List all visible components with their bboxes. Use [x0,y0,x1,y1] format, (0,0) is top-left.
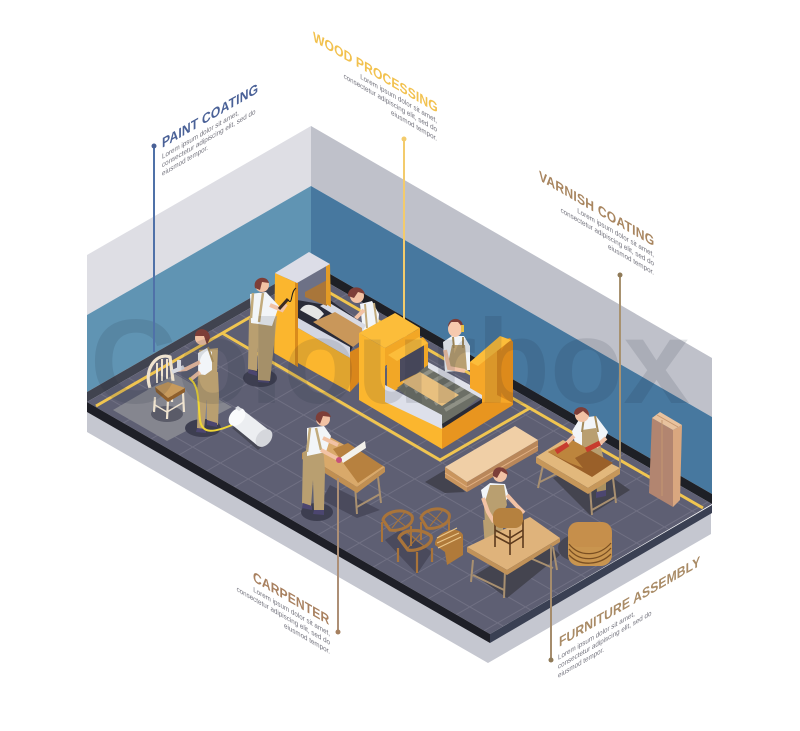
overalls [197,372,219,430]
machine 1 [274,252,366,392]
back panel [428,362,483,399]
callout: varnish coating [539,167,654,468]
gloves and arms [562,436,606,448]
arm [321,438,338,459]
legs [483,520,503,548]
base front [298,328,350,392]
text block: consectetur adipiscing elit, sed do [561,205,654,268]
shirt [572,416,608,447]
table legs [538,465,616,515]
wood board [313,312,362,347]
blade [300,305,324,320]
shirt [360,301,379,332]
head [575,408,589,422]
arms [176,362,200,380]
shirt [198,348,212,375]
machine 2 [359,313,513,449]
hose [189,378,232,431]
tower top [359,313,420,348]
drill and cable [279,299,288,309]
heading: FURNITURE ASSEMBLY [559,552,701,650]
right wall [311,126,712,504]
table top [536,440,620,488]
callout: furniture assembly [548,545,701,680]
arms [483,495,524,522]
wood plank [402,372,459,406]
shirt [481,483,509,505]
apron [484,485,507,525]
varnish worker and table [536,407,630,515]
spray gun [172,360,184,372]
stacked planks [649,412,682,507]
heading: PAINT COATING [162,79,258,151]
text block: eiusmod tempor. [162,142,208,178]
head [195,331,209,345]
table legs [471,547,557,598]
floor [87,273,712,643]
tower left [359,333,385,410]
base side [350,347,359,392]
heading: VARNISH COATING [539,167,654,250]
head [316,412,330,426]
table top [467,517,560,570]
floor drop shadow [87,412,711,663]
callout: carpenter [237,478,340,656]
head [255,278,269,292]
head [493,468,507,482]
callout: wood processing: WOOD PROCESSING [313,28,438,116]
table top [302,437,385,487]
watermark: Colourbox [90,295,690,429]
text block: consectetur adipiscing elit, sed do [162,107,255,170]
base [359,378,442,449]
board [333,443,383,483]
worker with drill [243,278,296,387]
tunnel [387,337,428,395]
floor tile grid [96,294,708,631]
overalls [302,447,325,510]
left wall [87,126,311,402]
feet [248,369,269,383]
table legs [355,477,381,514]
room shell [87,126,712,663]
apron [582,428,604,460]
tower top [275,252,330,283]
text block: eiusmod tempor. [284,620,330,656]
paint booth mat [113,374,232,441]
text block: consectetur adipiscing elit, sed do [558,608,651,671]
overalls [248,316,277,381]
text block: eiusmod tempor. [558,644,604,680]
text block: eiusmod tempor. [391,107,437,143]
furniture worker and table [467,467,560,598]
text block: Lorem ipsum dolor sit amet, [577,206,654,259]
back panel [320,302,366,332]
chair [148,356,185,422]
paint tank [225,405,276,450]
head [350,289,364,303]
stacked chair seats [558,522,612,566]
shirt [250,292,279,326]
worker behind machine 2 [443,319,470,372]
worker legs [596,470,606,494]
arm [270,304,286,310]
saw [340,441,366,463]
text block: Lorem ipsum dolor sit amet, [360,72,437,125]
front panel [298,318,350,358]
shirt [307,426,331,456]
right block [470,338,513,403]
lumber pile [425,426,538,493]
varnished board [548,440,613,477]
worker operating machine 1 [340,287,379,332]
paint worker [148,329,232,437]
stacked chair backs [435,530,463,565]
chair on table [493,508,523,555]
tower right [385,328,420,366]
chair frames [382,509,463,574]
arm [340,310,364,324]
text block: eiusmod tempor. [608,241,654,277]
text block: Lorem ipsum dolor sit amet, [162,108,239,161]
text block: consectetur adipiscing elit, sed do [344,71,437,134]
conveyor [298,300,365,352]
text block: Lorem ipsum dolor sit amet, [253,585,330,638]
tower inner [297,266,326,305]
callout: paint coating [152,79,258,352]
tower face [274,273,298,367]
feet [302,503,324,515]
carpenter worker and table [301,411,385,521]
yellow floor markings [96,282,703,508]
text block: Lorem ipsum dolor sit amet, [558,609,635,662]
heading: CARPENTER [253,568,329,628]
lip [442,399,482,428]
front panel [385,385,442,429]
rollers [397,365,482,428]
text block: consectetur adipiscing elit, sed do [237,584,330,647]
feet [196,420,217,433]
callout line: wood processing upper part [402,136,406,322]
